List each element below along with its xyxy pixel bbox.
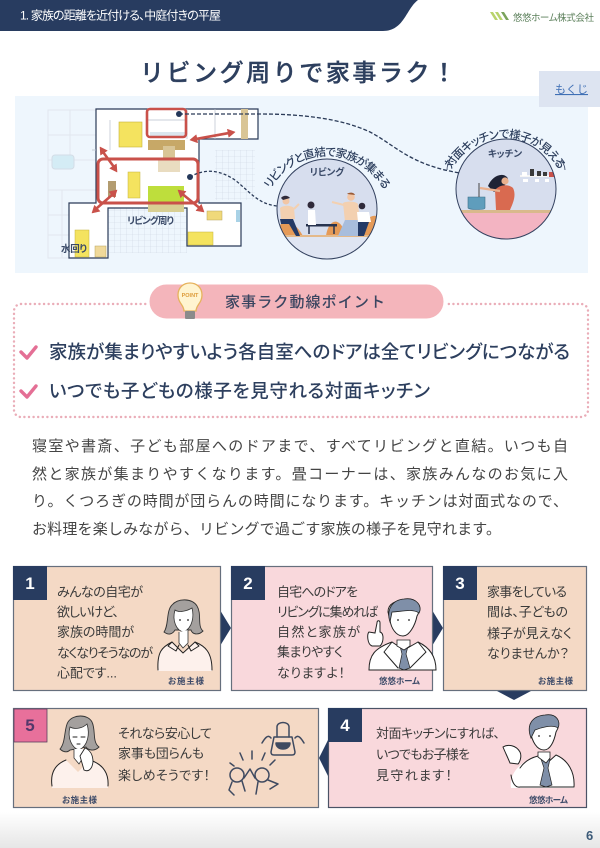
speech text 2: 自然と家族が bbox=[277, 624, 360, 640]
page number: 6 bbox=[586, 828, 593, 843]
speech text 4: 対面キッチンにすれば、 bbox=[376, 726, 500, 741]
speech text 2: リビングに集めれば bbox=[277, 604, 378, 620]
page title: リビング周りで家事ラク！ bbox=[140, 60, 456, 87]
speech text 1: 心配です... bbox=[57, 666, 117, 680]
red area: kitchen bbox=[147, 109, 186, 137]
speech text 1 bbox=[57, 584, 153, 680]
red arrows: doors to rooms bbox=[92, 129, 235, 213]
panel: floor plan background bbox=[15, 96, 588, 273]
label: kitchen: キッチン bbox=[488, 149, 522, 160]
person: advisor pointing bbox=[368, 599, 436, 670]
card 4 bbox=[328, 708, 586, 808]
plan label: utility: 水回り bbox=[61, 243, 87, 255]
icon: point light bulb: POINT bbox=[182, 293, 199, 299]
section heading: 1. 家族の距離を近付ける、中庭付きの平屋 bbox=[20, 8, 221, 22]
speech text 2: 集まりやすく bbox=[277, 644, 343, 660]
icon: apron bbox=[262, 722, 304, 755]
person: client worried bbox=[158, 600, 212, 671]
dashed connector: living bbox=[190, 171, 277, 206]
points pill heading: 家事ラク動線ポイント bbox=[225, 294, 385, 311]
speech text 2: なりますよ！ bbox=[277, 666, 345, 680]
check: first point bbox=[21, 347, 36, 358]
card 1 bbox=[13, 566, 220, 690]
card 2 bbox=[231, 566, 436, 690]
card 4: 4 bbox=[340, 716, 350, 735]
speech text 1: なくなりそうなのが bbox=[57, 646, 153, 660]
speech text 3: 間は、子どもの bbox=[487, 604, 568, 620]
speech text 1: みんなの自宅が bbox=[57, 584, 143, 600]
body paragraph: お料理を楽しみながら、リビングで過ごす家族の様子を見守れます。 bbox=[32, 521, 501, 538]
card 5 bbox=[14, 708, 318, 808]
speech text 3: 様子が見えなく bbox=[487, 626, 572, 641]
thin arc: kitchen caption bbox=[447, 160, 565, 170]
card 3: 3 bbox=[455, 574, 465, 593]
contents link bbox=[539, 71, 600, 107]
contents link: もくじ bbox=[555, 83, 588, 96]
speech text 3: 家事をしている bbox=[487, 584, 567, 600]
body paragraph: り。くつろぎの時間が団らんの時間になります。キッチンは対面式なので、 bbox=[32, 493, 568, 510]
card 5: お施主様 bbox=[62, 795, 97, 805]
marker: kitchen bbox=[176, 111, 182, 117]
plan label: living: リビング周り bbox=[127, 215, 174, 227]
body paragraph: 然と家族が集まりやすくなります。畳コーナーは、家族みんなのお気に入 bbox=[32, 466, 568, 483]
card 1: お施主様 bbox=[168, 676, 204, 686]
dashed connector: kitchen bbox=[179, 114, 460, 173]
speech text 4: いつでもお子様を bbox=[376, 747, 470, 762]
curved caption: kitchen: 対面キッチンで様子が見える bbox=[444, 128, 566, 169]
point text 1: 家族が集まりやすいよう各自室へのドアは全てリビングにつながる bbox=[49, 342, 570, 362]
speech text 5: 楽しめそうです！ bbox=[118, 768, 210, 783]
points pill heading bbox=[148, 283, 445, 320]
label: living: リビング bbox=[310, 166, 345, 178]
arrow: step 1 to 2 bbox=[220, 610, 231, 646]
marker: living bbox=[187, 174, 193, 180]
speech text 3 bbox=[487, 584, 572, 661]
icon: children high five bbox=[229, 751, 278, 795]
circle: kitchen scene bbox=[456, 139, 556, 243]
floor plan bbox=[48, 109, 258, 258]
check: second point bbox=[21, 386, 36, 397]
speech text 3: なりませんか？ bbox=[487, 646, 569, 661]
speech text 5: それなら安心して bbox=[118, 726, 212, 741]
speech text 5 bbox=[118, 726, 212, 783]
card 3 bbox=[443, 566, 586, 690]
circle: living scene bbox=[276, 159, 377, 266]
speech text 2 bbox=[277, 584, 378, 680]
speech text 2: 自宅へのドアを bbox=[277, 584, 358, 600]
icon: point light bulb bbox=[178, 283, 202, 319]
company logo: 悠悠ホーム株式会社 bbox=[513, 12, 594, 24]
body paragraph: 寝室や書斎、子ども部屋へのドアまで、すべてリビングと直結。いつも自 bbox=[32, 438, 568, 455]
speech text 4 bbox=[376, 726, 500, 783]
person: advisor presenting bbox=[503, 715, 574, 788]
card 2: 悠悠ホーム bbox=[379, 676, 421, 686]
panel: points box bbox=[14, 283, 588, 417]
point text 2: いつでも子どもの様子を見守れる対面キッチン bbox=[49, 380, 431, 402]
curved caption: living: リビングと直結で家族が集まる bbox=[264, 146, 390, 188]
card 1: 1 bbox=[25, 574, 35, 593]
arrow: step 4 to 5 bbox=[319, 740, 328, 776]
footer band bbox=[0, 812, 600, 848]
red area: living bbox=[98, 159, 198, 203]
speech text 1: 欲しいけど、 bbox=[57, 604, 119, 620]
header bar bbox=[0, 0, 418, 31]
speech text 5: 家事も団らんも bbox=[118, 746, 204, 761]
speech text 1: 家族の時間が bbox=[57, 624, 134, 640]
speech text 4: 見守れます！ bbox=[376, 768, 452, 783]
body paragraph bbox=[32, 438, 568, 538]
card 2: 2 bbox=[243, 574, 253, 593]
card 5: 5 bbox=[25, 716, 35, 735]
person: client relieved bbox=[52, 716, 108, 788]
card 4: 悠悠ホーム bbox=[529, 795, 569, 805]
arrow: step 2 to 3 bbox=[432, 610, 443, 646]
arrow: step 3 to 4 bbox=[497, 691, 531, 700]
card 3: お施主様 bbox=[538, 676, 573, 686]
